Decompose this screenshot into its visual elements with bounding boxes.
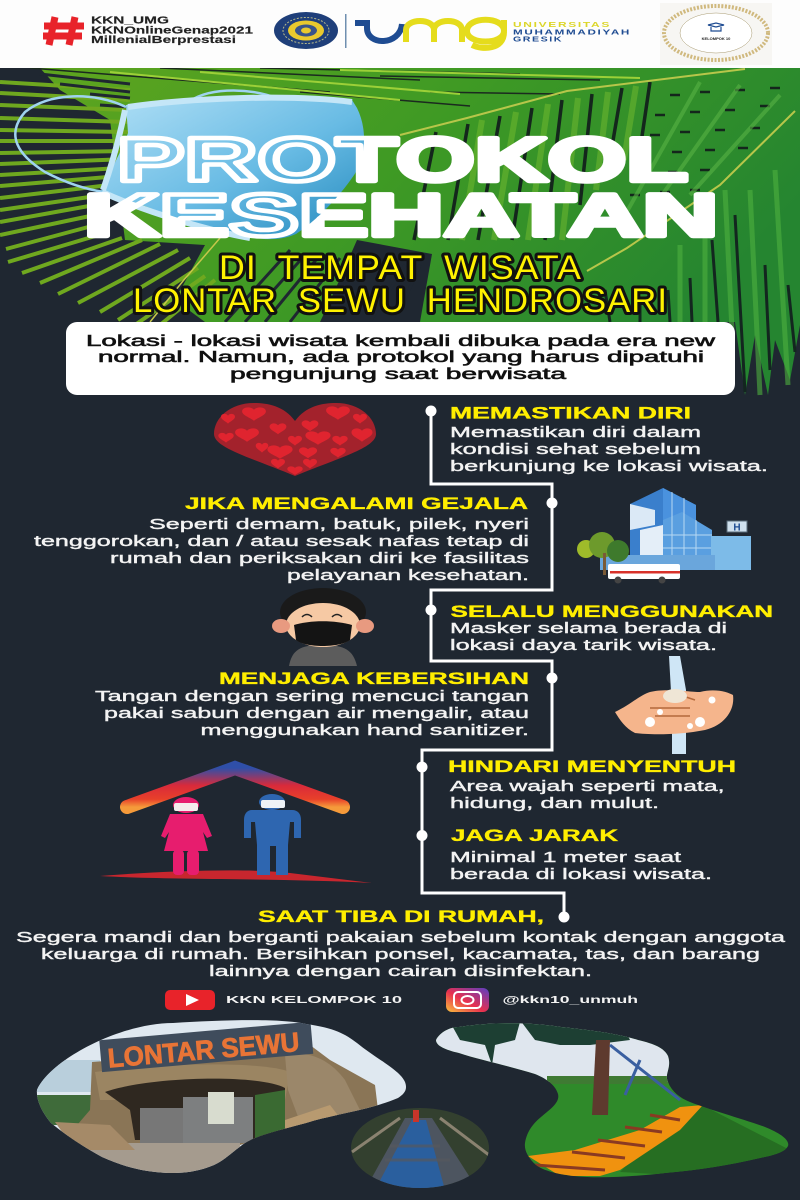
hashtag text: KKNOnlineGenap2021 xyxy=(91,24,253,36)
step: saat tiba di rumah: Segera mandi dan berganti pakaian sebelum kontak dengan anggota xyxy=(16,929,786,946)
dark gaps near top left xyxy=(40,74,130,107)
step: jika mengalami gejala: rumah dan periksakan diri ke fasilitas xyxy=(110,550,529,567)
step: hindari menyentuh: hidung, dan mulut. xyxy=(450,795,659,812)
step: selalu menggunakan: lokasi daya tarik wisata. xyxy=(450,637,717,654)
step: saat tiba di rumah: keluarga di rumah. Bersihkan ponsel, kacamata, tas, dan barang xyxy=(41,946,760,963)
badge: kelompok 10 xyxy=(660,3,772,65)
icon: hospital xyxy=(577,488,751,584)
step: selalu menggunakan xyxy=(450,603,773,654)
light leaflets xyxy=(462,86,636,240)
icon: university seal xyxy=(274,12,338,49)
title xyxy=(84,126,718,249)
dashes between fronds xyxy=(630,88,780,195)
left leaflets xyxy=(0,82,215,325)
header bar xyxy=(0,0,800,68)
lower right frond xyxy=(605,215,795,392)
icon: washing hands xyxy=(615,656,733,754)
step: menjaga kebersihan: menggunakan hand sanitizer. xyxy=(200,722,529,739)
intro box: Lokasi - lokasi wisata kembali dibuka pada era new xyxy=(86,333,716,350)
woman xyxy=(161,797,212,875)
step: jaga jarak: Minimal 1 meter saat xyxy=(450,849,682,866)
photo: painted bridge xyxy=(350,1105,490,1190)
badge: kelompok 10: KELOMPOK 10 xyxy=(702,36,731,41)
step: selalu menggunakan: Masker selama berada di xyxy=(450,620,727,637)
icon: two people under a roof xyxy=(100,768,372,883)
social: instagram xyxy=(446,988,638,1012)
step: saat tiba di rumah: lainnya dengan cairan disinfektan. xyxy=(209,963,592,980)
university name xyxy=(513,22,631,44)
tree xyxy=(577,540,595,558)
icon: heart of hearts xyxy=(214,403,376,476)
subtitle: DI TEMPAT WISATA xyxy=(219,249,582,287)
dark gaps lower middle xyxy=(224,249,342,322)
photo: garden path xyxy=(430,1020,795,1185)
hashtag text xyxy=(91,14,253,46)
intro box: pengunjung saat berwisata xyxy=(230,366,566,383)
step: hindari menyentuh: Area wajah seperti mata, xyxy=(450,778,724,795)
dark gaps: below main rib xyxy=(414,82,650,240)
palm leaves xyxy=(0,68,800,395)
step: menjaga kebersihan: pakai sabun dengan air mengalir, atau xyxy=(104,705,529,722)
step: saat tiba di rumah xyxy=(16,908,786,980)
icon: hospital: H xyxy=(733,522,741,534)
university name: UNIVERSITAS xyxy=(513,22,611,29)
university name: MUHAMMADIYAH xyxy=(513,30,631,36)
roof xyxy=(127,768,343,807)
subtitle: LONTAR SEWU HENDROSARI xyxy=(133,282,668,320)
icon: red hashtag xyxy=(43,17,84,45)
step: menjaga kebersihan: MENJAGA KEBERSIHAN xyxy=(219,670,529,688)
ambulance xyxy=(608,564,680,579)
yellow rib lower left xyxy=(150,238,220,322)
intro box: normal. Namun, ada protokol yang harus dipatuhi xyxy=(98,349,704,366)
step: jika mengalami gejala xyxy=(34,495,529,584)
step: memastikan diri: MEMASTIKAN DIRI xyxy=(450,404,691,422)
dark gaps: upper frond xyxy=(30,68,600,106)
social: instagram: @kkn10_unmuh xyxy=(502,995,638,1006)
logo: UMG xyxy=(355,20,504,48)
subtitle xyxy=(133,249,668,320)
intro box xyxy=(66,322,735,395)
icon: person wearing mask xyxy=(272,588,374,666)
light lines upper frond xyxy=(110,70,640,100)
timeline xyxy=(416,406,570,922)
photo: lontar sewu gate xyxy=(36,1020,406,1173)
step: memastikan diri xyxy=(450,404,768,475)
title: KESEHATAN xyxy=(84,182,718,249)
step: jaga jarak: JAGA JARAK xyxy=(451,827,618,845)
hashtag text: MillenialBerprestasi xyxy=(91,34,236,46)
step: hindari menyentuh: HINDARI MENYENTUH xyxy=(448,758,736,776)
step: menjaga kebersihan xyxy=(95,670,529,739)
main ribs xyxy=(400,69,795,271)
photo: lontar sewu gate: LONTAR SEWU xyxy=(107,1027,300,1074)
step: jika mengalami gejala: JIKA MENGALAMI GEJALA xyxy=(185,495,528,513)
social: youtube xyxy=(165,990,403,1010)
hashtag text: KKN_UMG xyxy=(91,14,169,26)
divider xyxy=(345,14,346,48)
social: youtube: KKN KELOMPOK 10 xyxy=(226,995,403,1006)
university name: GRESIK xyxy=(513,36,563,44)
step: hindari menyentuh xyxy=(448,758,736,812)
step: jika mengalami gejala: Seperti demam, batuk, pilek, nyeri xyxy=(149,516,529,533)
step: jaga jarak: berada di lokasi wisata. xyxy=(450,866,712,883)
icon: surgical mask xyxy=(15,90,364,239)
man xyxy=(244,794,301,875)
title: PROTOKOL xyxy=(117,126,688,195)
step: menjaga kebersihan: Tangan dengan sering mencuci tangan xyxy=(95,688,529,705)
step: saat tiba di rumah: SAAT TIBA DI RUMAH, xyxy=(258,908,544,926)
step: jika mengalami gejala: pelayanan kesehatan. xyxy=(287,567,529,584)
step: jika mengalami gejala: tenggorokan, dan / atau sesak nafas tetap di xyxy=(34,533,529,550)
step: memastikan diri: Memastikan diri dalam xyxy=(450,424,701,441)
step: memastikan diri: berkunjung ke lokasi wisata. xyxy=(450,458,768,475)
step: selalu menggunakan: SELALU MENGGUNAKAN xyxy=(450,603,773,621)
step: memastikan diri: kondisi sehat sebelum xyxy=(450,441,701,458)
step: jaga jarak xyxy=(450,827,712,883)
ground xyxy=(100,870,372,883)
